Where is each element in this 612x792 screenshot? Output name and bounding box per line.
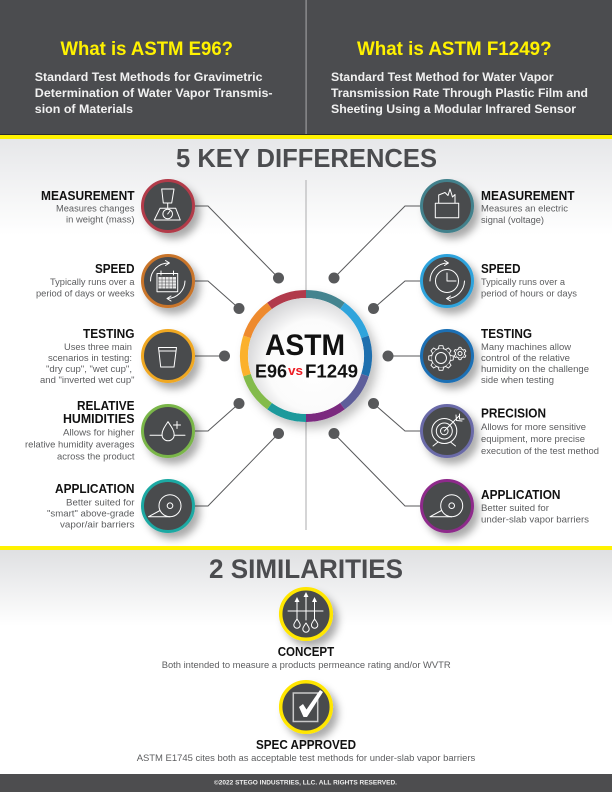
heading: MEASUREMENT <box>481 188 575 203</box>
icon: sensor box <box>422 180 472 232</box>
description <box>40 342 134 386</box>
header panel <box>0 0 612 135</box>
icon: roll <box>422 480 472 532</box>
yellow divider middle <box>0 546 612 550</box>
heading: MEASUREMENT <box>41 188 135 203</box>
heading: PRECISION <box>481 406 546 421</box>
badge text E96 vs F1249: vs <box>288 363 303 378</box>
text block: F1249 definition: Transmission Rate Through Plastic Film and <box>331 88 588 100</box>
text block: F1249 definition <box>331 72 588 116</box>
differences background <box>0 139 612 235</box>
description: and "inverted wet cup" <box>40 375 134 386</box>
heading: CONCEPT <box>278 644 334 659</box>
badge text ASTM: ASTM <box>265 329 345 362</box>
description: scenarios in testing: <box>48 353 132 364</box>
description <box>56 204 135 226</box>
icon: arrows and droplets <box>281 589 331 639</box>
description: Typically runs over a <box>481 277 566 288</box>
description: control of the relative <box>481 353 570 364</box>
panel: F1249 testing <box>422 326 589 386</box>
description: Allows for higher <box>63 428 135 439</box>
icon: cup on scale <box>142 180 194 232</box>
heading: what is ASTM E96: What is ASTM E96? <box>60 38 233 60</box>
description <box>481 277 577 299</box>
panel: E96 relative humidities <box>25 398 194 463</box>
heading: what is ASTM F1249: What is ASTM F1249? <box>357 38 552 60</box>
description: Better suited for <box>66 498 135 509</box>
description: Allows for more sensitive <box>481 422 586 433</box>
heading: 5 key differences: 5 KEY DIFFERENCES <box>176 143 437 173</box>
text block: F1249 definition: Sheeting Using a Modular Infrared Sensor <box>331 104 577 116</box>
description: under-slab vapor barriers <box>481 515 589 526</box>
description: Better suited for <box>481 503 550 514</box>
description <box>481 342 589 386</box>
heading: TESTING <box>481 326 532 341</box>
text block: E96 definition: Standard Test Methods for Gravimetric <box>35 72 263 84</box>
heading: TESTING <box>83 326 134 341</box>
description: side when testing <box>481 375 554 386</box>
icon: target with arrow <box>422 406 472 456</box>
heading: SPEED <box>95 261 134 276</box>
panel: F1249 measurement <box>422 180 575 232</box>
panel: E96 testing <box>40 326 194 386</box>
panel: F1249 application <box>422 480 589 532</box>
panel: F1249 speed <box>422 256 577 306</box>
description: Many machines allow <box>481 342 571 353</box>
center vertical line <box>305 180 307 530</box>
icon: checkbox <box>281 682 331 732</box>
heading line two: HUMIDITIES <box>63 411 135 426</box>
description: humidity on the challenge <box>481 364 589 375</box>
badge text E96 vs F1249: F1249 <box>305 361 358 381</box>
panel: F1249 precision <box>422 406 599 457</box>
description: Both intended to measure a products permeance rating and/or WVTR <box>162 660 451 671</box>
description: "dry cup", "wet cup", <box>46 364 132 375</box>
panel: E96 measurement <box>41 180 194 232</box>
description <box>481 422 599 457</box>
badge text E96 vs F1249: E96 <box>255 361 287 381</box>
description <box>481 503 589 526</box>
icon: calendar with arrows <box>142 256 194 306</box>
text block: F1249 definition: Standard Test Method for Water Vapor <box>331 72 554 84</box>
description: "smart" above-grade <box>47 509 134 520</box>
text block: E96 definition <box>35 72 273 116</box>
center badge <box>240 290 372 422</box>
description: Measures changes <box>56 204 135 215</box>
heading: 2 similarities: 2 SIMILARITIES <box>209 554 403 584</box>
panel: E96 speed <box>36 256 194 306</box>
heading: APPLICATION <box>481 487 560 502</box>
badge text E96 vs F1249 <box>255 361 358 381</box>
icon: clock with arrows <box>422 256 472 306</box>
description: in weight (mass) <box>66 215 134 226</box>
similarities background <box>0 550 612 626</box>
description: relative humidity averages <box>25 440 135 451</box>
footer <box>0 774 612 792</box>
text block: E96 definition: sion of Materials <box>35 104 133 116</box>
description: ASTM E1745 cites both as acceptable test methods for under-slab vapor barriers <box>137 753 475 764</box>
heading: SPEC APPROVED <box>256 737 356 752</box>
description <box>36 277 135 300</box>
description: Uses three main <box>64 342 132 353</box>
description: signal (voltage) <box>481 215 544 226</box>
description: across the product <box>57 452 135 463</box>
description: equipment, more precise <box>481 434 585 445</box>
heading: APPLICATION <box>55 481 134 496</box>
connector lines and dots <box>195 206 420 506</box>
text block: E96 definition: Determination of Water Vapor Transmis- <box>35 88 273 100</box>
description: Typically runs over a <box>50 277 135 288</box>
description <box>25 428 135 463</box>
heading: RELATIVE <box>77 398 135 413</box>
description: vapor/air barriers <box>60 520 135 531</box>
panel: concept <box>162 589 451 671</box>
icon: droplet with plus <box>142 406 194 456</box>
description <box>481 204 568 226</box>
description: Measures an electric <box>481 204 568 215</box>
yellow divider top <box>0 135 612 139</box>
description: period of hours or days <box>481 288 577 299</box>
icon: roll <box>142 480 194 532</box>
panel: E96 application <box>47 480 194 532</box>
panel: spec approved <box>137 682 475 764</box>
description: period of days or weeks <box>36 289 135 300</box>
heading: SPEED <box>481 261 520 276</box>
icon: cup <box>142 330 194 382</box>
icon: gears <box>422 330 472 382</box>
description: execution of the test method <box>481 446 599 457</box>
description <box>47 498 135 531</box>
footer: ©2022 STEGO INDUSTRIES, LLC. ALL RIGHTS RESERVED. <box>214 778 397 786</box>
